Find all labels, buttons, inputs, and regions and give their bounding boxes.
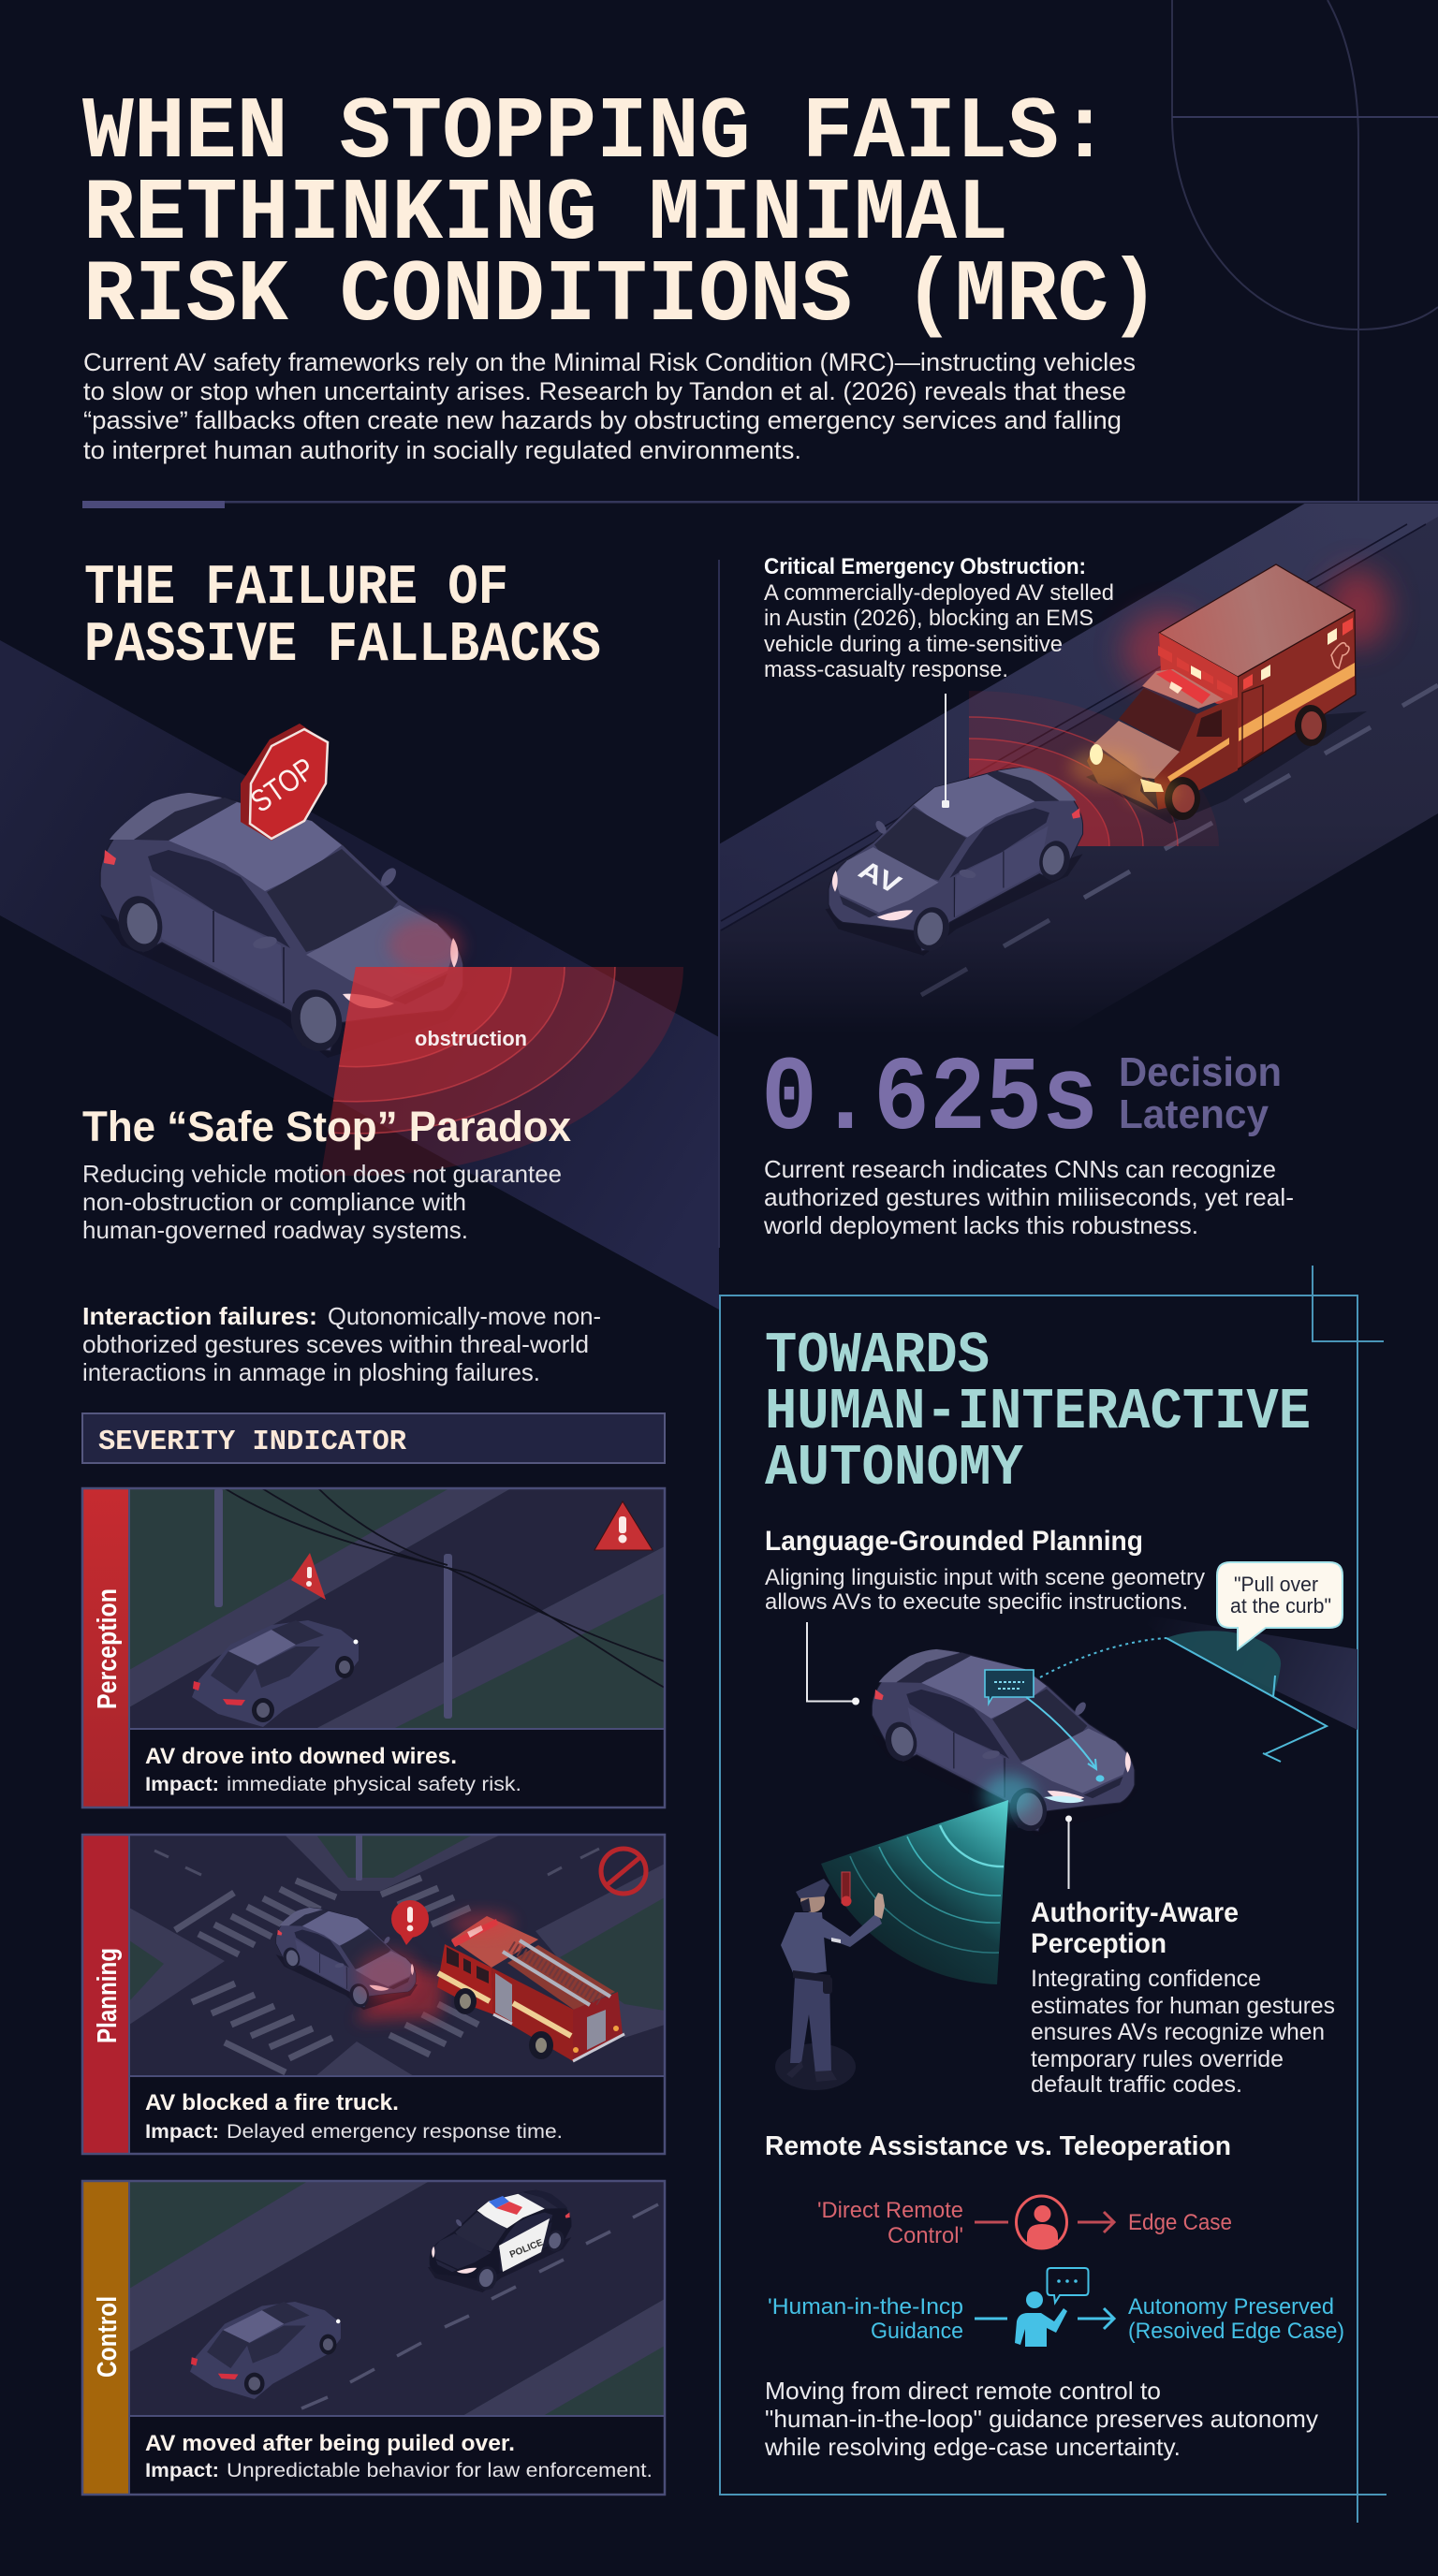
caption: perception: immediate physical safety risk. [227, 1774, 521, 1795]
statistic: decision latency: Latency [1119, 1091, 1269, 1137]
text block: authority-aware perception: estimates for human gestures [1031, 1993, 1335, 2019]
severity indicator header [82, 1413, 665, 1463]
heading: towards human-interactive autonomy: HUMAN-INTERACTIVE [765, 1379, 1311, 1445]
caption: perception: Impact: [145, 1774, 219, 1795]
title [82, 84, 1160, 346]
flow row: human-in-the-loop guidance: 'Human-in-the-Incp [768, 2294, 963, 2320]
text block: CNN research: Current research indicates CNNs can recognize [764, 1155, 1276, 1183]
caption: control [129, 2416, 665, 2495]
text block: language-grounded planning [765, 1526, 1205, 1615]
icon: operator [1017, 2196, 1067, 2248]
callout: critical emergency obstruction: A commercially-deployed AV stelled [764, 580, 1114, 606]
route dotted path [1040, 1638, 1167, 1677]
text block: authority-aware perception: default traffic codes. [1031, 2071, 1242, 2098]
caption: planning [129, 2076, 665, 2154]
caption: control: Unpredictable behavior for law enforcement. [227, 2460, 653, 2481]
text block: CNN research: authorized gestures within miliiseconds, yet real- [764, 1183, 1294, 1211]
text block: authority-aware perception: Authority-Aware [1031, 1897, 1239, 1928]
closing paragraph: "human-in-the-loop" guidance preserves autonomy [765, 2405, 1318, 2433]
decorative header lines [1172, 0, 1438, 502]
illustration: road left [0, 640, 719, 1310]
icon: guide person with speech bubble [1015, 2268, 1088, 2347]
callout: critical emergency obstruction: in Austin (2026), blocking an EMS [764, 606, 1093, 631]
intro paragraph: Current AV safety frameworks rely on the Minimal Risk Condition (MRC)—instructing vehicles [83, 348, 1136, 376]
flow row: direct remote control: 'Direct Remote [817, 2198, 963, 2223]
panel: human-interactive autonomy [720, 1266, 1387, 2523]
speech bubble: pull over [1217, 1562, 1343, 1649]
icon: stop sign [241, 724, 328, 841]
closing paragraph [764, 2377, 1318, 2461]
card: control [82, 2181, 665, 2495]
severity bar: planning [82, 1835, 129, 2154]
caption: planning: AV blocked a fire truck. [145, 2090, 399, 2115]
intro paragraph: to slow or stop when uncertainty arises. Research by Tandon et al. (2026) reveals that these [83, 377, 1126, 405]
text block: safe stop paradox: Reducing vehicle motion does not guarantee [82, 1160, 562, 1188]
text block: authority-aware perception: ensures AVs recognize when [1031, 2019, 1325, 2045]
flow row: human-in-the-loop guidance: Autonomy Preserved [1128, 2294, 1334, 2320]
caption: planning: Delayed emergency response time. [227, 2121, 563, 2143]
flow row: direct remote control: Control' [888, 2223, 963, 2248]
car: police: POLICE [508, 2238, 545, 2261]
crosswalks [175, 1878, 478, 2072]
label: planning: Planning [93, 1948, 123, 2043]
severity bar: control [82, 2181, 129, 2495]
text block: authority-aware perception: Perception [1031, 1928, 1167, 1959]
text block: interaction failures: Qutonomically-move non- [328, 1302, 601, 1330]
car: AV [826, 768, 1083, 956]
heading: the failure of passive fallbacks [84, 557, 601, 678]
text block: safe stop paradox: human-governed roadway systems. [82, 1216, 468, 1244]
heading: the failure of passive fallbacks: PASSIVE FALLBACKS [84, 614, 601, 678]
text block: interaction failures: Interaction failures: [82, 1302, 317, 1330]
text block: authority-aware perception: Integrating confidence [1031, 1966, 1261, 1992]
title: RETHINKING MINIMAL [83, 166, 1008, 265]
panel frame [720, 1266, 1387, 2523]
card: perception [82, 1488, 665, 1808]
car: stopped AV [100, 793, 468, 1058]
callout: critical emergency obstruction: vehicle during a time-sensitive [764, 632, 1063, 657]
scene: blocked fire truck [129, 1834, 665, 2076]
title: WHEN STOPPING FAILS: [82, 84, 1110, 183]
text block: authority-aware perception [1031, 1897, 1335, 2098]
icon: stop sign: STOP [244, 751, 321, 819]
scene: AV and police car [129, 2181, 665, 2416]
curb target zone [1167, 1623, 1357, 1763]
callout: critical emergency obstruction: Critical Emergency Obstruction: [764, 554, 1086, 579]
intro paragraph: “passive” fallbacks often create new hazards by obstructing emergency services and falling [83, 406, 1122, 434]
callout: critical emergency obstruction [764, 554, 1114, 808]
text block: safe stop paradox [82, 1103, 571, 1244]
speech bubble: pull over: "Pull over [1234, 1573, 1318, 1596]
illustration: AV obstructing ambulance [826, 564, 1389, 956]
callout leader: authority-aware [1065, 1816, 1072, 1889]
text block: authority-aware perception: temporary rules override [1031, 2046, 1284, 2072]
label: control: Control [93, 2296, 123, 2378]
card: planning [82, 1834, 665, 2154]
flow row: direct remote control [817, 2196, 1232, 2248]
text block: interaction failures: obthorized gestures sceves within threal-world [82, 1330, 589, 1358]
text block: CNN research [763, 1155, 1294, 1239]
caption: control: AV moved after being puiled over. [145, 2431, 515, 2456]
text block: CNN research: world deployment lacks this robustness. [763, 1211, 1198, 1239]
hologram bubble and path on car [985, 1670, 1105, 1803]
subheading: remote assistance vs teleoperation: Remote Assistance vs. Teleoperation [765, 2131, 1231, 2161]
closing paragraph: Moving from direct remote control to [765, 2377, 1161, 2405]
obstruction radar zone [321, 919, 683, 1176]
closing paragraph: while resolving edge-case uncertainty. [764, 2433, 1181, 2461]
label: perception: Perception [93, 1588, 123, 1709]
scene: downed wires [129, 1488, 665, 1729]
text block: safe stop paradox: The “Safe Stop” Paradox [82, 1103, 571, 1150]
icon: prohibited [601, 1849, 646, 1894]
callout leader: language-grounded [807, 1622, 859, 1705]
flow row: human-in-the-loop guidance: (Resoived Edge Case) [1128, 2319, 1344, 2344]
text block: language-grounded planning: Language-Grounded Planning [765, 1526, 1143, 1557]
illustration: road right [720, 504, 1438, 998]
text block: interaction failures [82, 1302, 601, 1386]
caption: perception [129, 1729, 665, 1808]
text block: language-grounded planning: allows AVs to execute specific instructions. [765, 1589, 1188, 1615]
car: guided AV [872, 1649, 1138, 1836]
statistic: decision latency: 0.625s [761, 1041, 1098, 1160]
AV hood label: AV [854, 855, 906, 900]
ambulance [1069, 564, 1389, 824]
heading: towards human-interactive autonomy: AUTONOMY [765, 1435, 1024, 1501]
icon: alert bubble [391, 1900, 429, 1945]
heading: the failure of passive fallbacks: THE FAILURE OF [84, 557, 508, 621]
caption: control: Impact: [145, 2460, 219, 2481]
title: RISK CONDITIONS (MRC) [83, 247, 1160, 346]
speech bubble: pull over: at the curb" [1230, 1594, 1331, 1617]
header divider with tab [82, 501, 1438, 508]
text block: safe stop paradox: non-obstruction or compliance with [82, 1188, 466, 1216]
statistic: decision latency: Decision [1119, 1049, 1282, 1095]
flow row: direct remote control: Edge Case [1128, 2210, 1232, 2235]
severity bar: perception [82, 1488, 129, 1808]
text block: interaction failures: interactions in anmage in ploshing failures. [82, 1358, 540, 1386]
radar waves [969, 691, 1219, 846]
section divider vertical [718, 560, 720, 1248]
obstruction label: obstruction [415, 1027, 527, 1050]
illustration: police officer gesturing [775, 1872, 885, 2090]
sensor fan [821, 1775, 1035, 1984]
heading: towards human-interactive autonomy [765, 1323, 1311, 1501]
fire truck [431, 1916, 624, 2069]
heading: towards human-interactive autonomy: TOWARDS [765, 1323, 990, 1389]
flow row: human-in-the-loop guidance [768, 2268, 1344, 2347]
intro paragraph: to interpret human authority in socially regulated environments. [83, 436, 801, 464]
illustration: stopped AV with stop sign and obstruction zone [100, 724, 683, 1176]
text block: language-grounded planning: Aligning linguistic input with scene geometry [765, 1565, 1205, 1590]
intro paragraph [83, 348, 1136, 464]
callout: critical emergency obstruction: mass-casualty response. [764, 657, 1008, 682]
flow row: human-in-the-loop guidance: Guidance [871, 2319, 963, 2344]
caption: planning: Impact: [145, 2121, 219, 2143]
caption: perception: AV drove into downed wires. [145, 1744, 457, 1769]
severity indicator header: SEVERITY INDICATOR [98, 1426, 406, 1458]
car: police [428, 2190, 571, 2292]
